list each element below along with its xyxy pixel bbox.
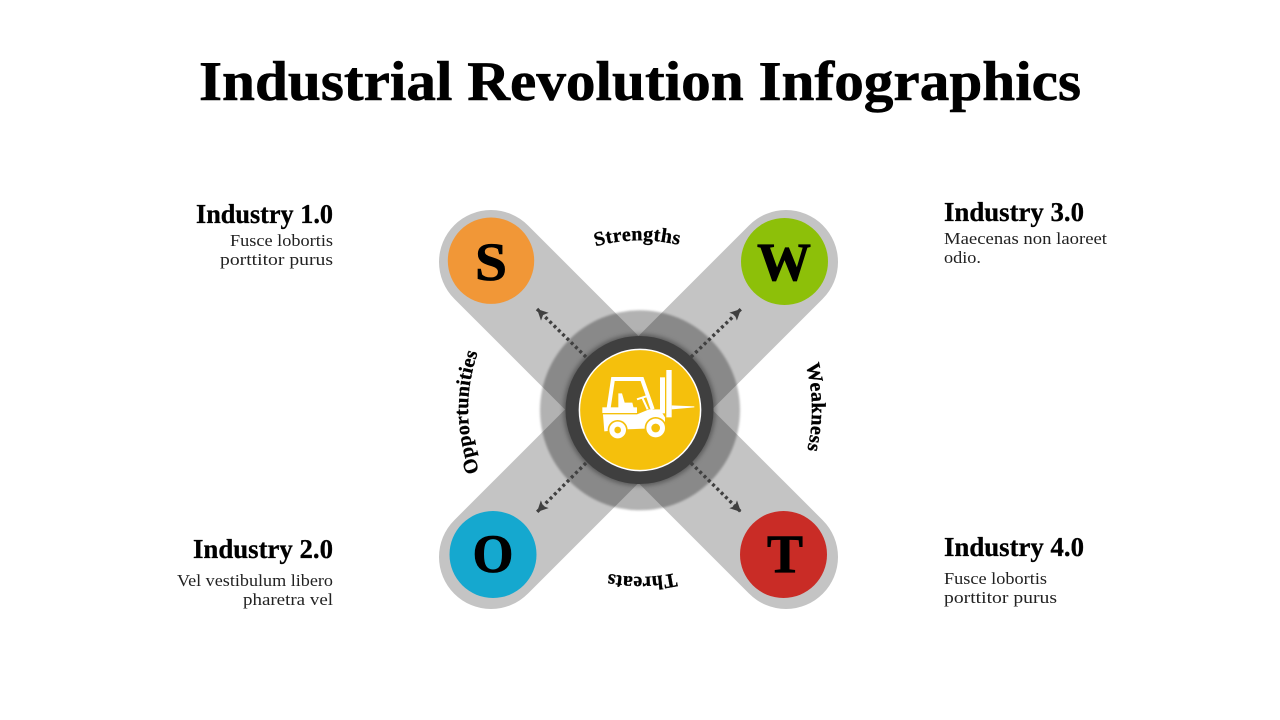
center yellow circle	[579, 349, 701, 471]
text block: Industry 3.0	[944, 197, 1107, 267]
curved label: Weakness: Weakness	[806, 362, 826, 452]
text block: Industry 1.0	[196, 199, 333, 269]
text block: Industry 4.0	[944, 532, 1084, 607]
text block: Industry 2.0: Vel vestibulum libero	[177, 571, 333, 590]
text block: Industry 1.0: Fusce lobortis	[230, 231, 333, 250]
circle T	[740, 511, 827, 598]
circle W: W	[757, 232, 811, 292]
circle T: T	[767, 524, 803, 584]
circle O: O	[472, 524, 514, 584]
translucent outer ring	[540, 310, 740, 510]
title: Industrial Revolution Infographics	[199, 51, 1081, 113]
arrow: south-east	[691, 463, 741, 512]
circle W	[741, 218, 828, 305]
text block: Industry 4.0: porttitor purus	[944, 588, 1057, 607]
curved label: Opportunities: Opportunities	[456, 350, 479, 474]
text block: Industry 2.0: Industry 2.0	[193, 534, 333, 564]
text block: Industry 1.0: porttitor purus	[220, 250, 333, 269]
curved label: Strengths: Strengths	[594, 228, 680, 246]
arrow: north-west	[537, 309, 586, 357]
text block: Industry 4.0: Industry 4.0	[944, 532, 1084, 562]
circle S	[448, 218, 534, 304]
curved label: Threats: Threats	[608, 574, 678, 590]
circle S: S	[475, 232, 507, 292]
text block: Industry 3.0: Maecenas non laoreet	[944, 229, 1107, 248]
icon: forklift	[602, 370, 694, 440]
dark ring	[564, 334, 716, 486]
text block: Industry 3.0: Industry 3.0	[944, 197, 1084, 227]
text block: Industry 2.0: pharetra vel	[243, 590, 333, 609]
text block: Industry 2.0	[177, 534, 333, 609]
circle O	[450, 511, 536, 598]
arrow: north-east	[691, 309, 741, 357]
arrow: south-west	[537, 463, 586, 512]
text block: Industry 3.0: odio.	[944, 248, 981, 267]
text block: Industry 4.0: Fusce lobortis	[944, 569, 1047, 588]
text block: Industry 1.0: Industry 1.0	[196, 199, 333, 229]
cross bars	[491, 262, 786, 557]
